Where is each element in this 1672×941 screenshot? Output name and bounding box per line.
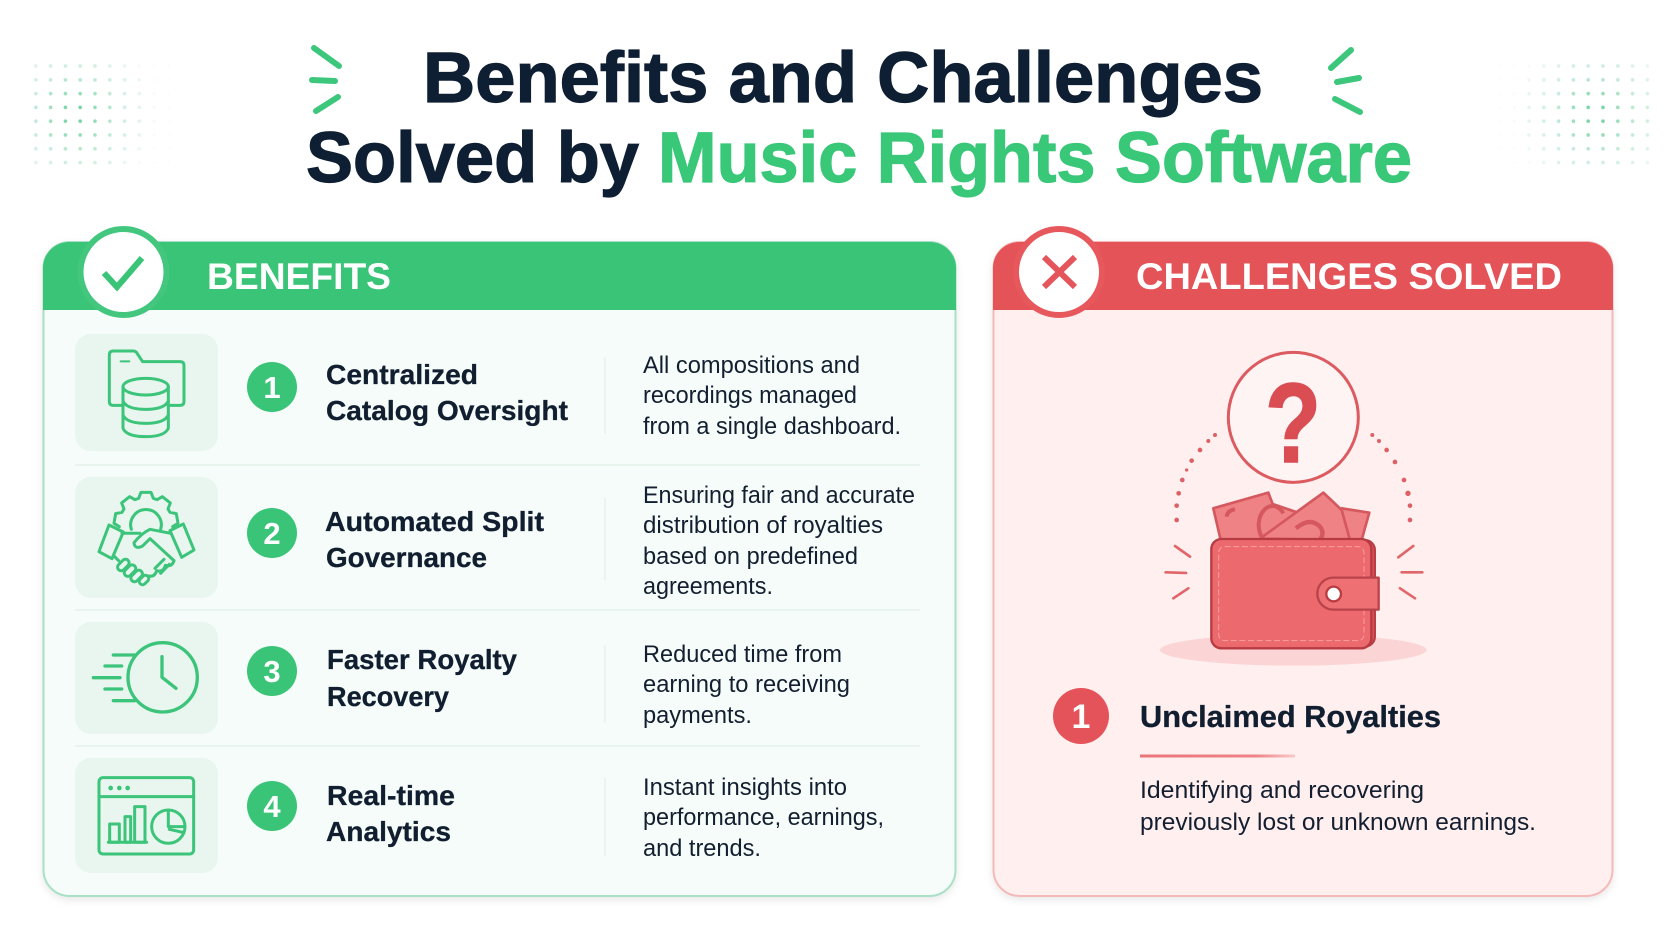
number badge 2 — [247, 508, 297, 558]
icon box: folder database — [75, 334, 218, 451]
item description: payments. — [643, 702, 752, 729]
item description: Instant insights into — [643, 774, 847, 801]
item title: Faster Royalty — [327, 644, 517, 675]
heading: challenges solved: CHALLENGES SOLVED — [1136, 256, 1562, 297]
number badge 3: 3 — [263, 654, 281, 689]
number badge 1: 1 — [263, 370, 281, 405]
item description — [643, 641, 850, 729]
panel body — [44, 242, 956, 896]
challenge description — [1140, 777, 1536, 836]
title — [306, 39, 1412, 198]
number badge 1: 1 — [1072, 698, 1090, 736]
title: Benefits and Challenges — [423, 39, 1263, 118]
row 4 — [75, 758, 884, 873]
heading: benefits: BENEFITS — [207, 256, 391, 297]
challenge description: Identifying and recovering — [1140, 777, 1424, 804]
item title — [326, 359, 568, 426]
item description: agreements. — [643, 573, 773, 600]
item title — [325, 506, 544, 573]
dot pattern: left — [34, 64, 156, 164]
icon box: gear handshake — [75, 477, 218, 598]
panel header — [43, 242, 956, 310]
panel header — [993, 242, 1613, 310]
item description: based on predefined — [643, 543, 858, 570]
icon: left title sparks — [312, 48, 339, 111]
item description: performance, earnings, — [643, 804, 884, 831]
item title — [326, 780, 455, 847]
row 1 — [75, 334, 901, 451]
item description: from a single dashboard. — [643, 413, 901, 440]
item description — [643, 482, 915, 600]
item description: distribution of royalties — [643, 512, 883, 539]
number badge 4: 4 — [263, 789, 281, 824]
item description: earning to receiving — [643, 671, 850, 698]
item title: Governance — [326, 542, 487, 573]
icon: right title sparks — [1331, 50, 1360, 112]
item title — [327, 644, 517, 712]
item title: Real-time — [327, 780, 455, 811]
title: Solved by — [306, 119, 639, 198]
challenge description: previously lost or unknown earnings. — [1140, 809, 1536, 836]
number badge 4 — [247, 781, 297, 831]
icon: question mark: ? — [1265, 360, 1321, 486]
number badge 3 — [247, 646, 297, 696]
icon: cross badge — [1016, 229, 1102, 315]
item description — [643, 774, 884, 862]
number badge 1 — [247, 362, 297, 412]
item description: and trends. — [643, 835, 761, 862]
item description: Reduced time from — [643, 641, 842, 668]
icon: check badge — [80, 229, 166, 315]
item title: Catalog Oversight — [326, 395, 568, 426]
item title: Centralized — [326, 359, 478, 390]
illustration: wallet with question mark — [1160, 352, 1427, 666]
number badge 2: 2 — [263, 516, 281, 551]
panel body — [994, 242, 1612, 896]
item title: Automated Split — [325, 506, 544, 537]
icon box: analytics dashboard — [75, 758, 218, 873]
item description: Ensuring fair and accurate — [643, 482, 915, 509]
item description: recordings managed — [643, 382, 857, 409]
icon box: fast clock — [75, 622, 218, 734]
challenge title: Unclaimed Royalties — [1140, 699, 1441, 734]
panel: benefits — [43, 229, 956, 896]
row 2 — [75, 477, 915, 600]
title: Music Rights Software — [658, 119, 1412, 198]
row 3 — [75, 622, 850, 734]
item title: Recovery — [327, 681, 449, 712]
item title: Analytics — [326, 816, 451, 847]
panel: challenges solved — [993, 229, 1613, 896]
dot pattern: right — [1515, 64, 1650, 164]
number badge 1 — [1053, 688, 1109, 744]
item description: All compositions and — [643, 352, 860, 379]
item description — [643, 352, 901, 440]
